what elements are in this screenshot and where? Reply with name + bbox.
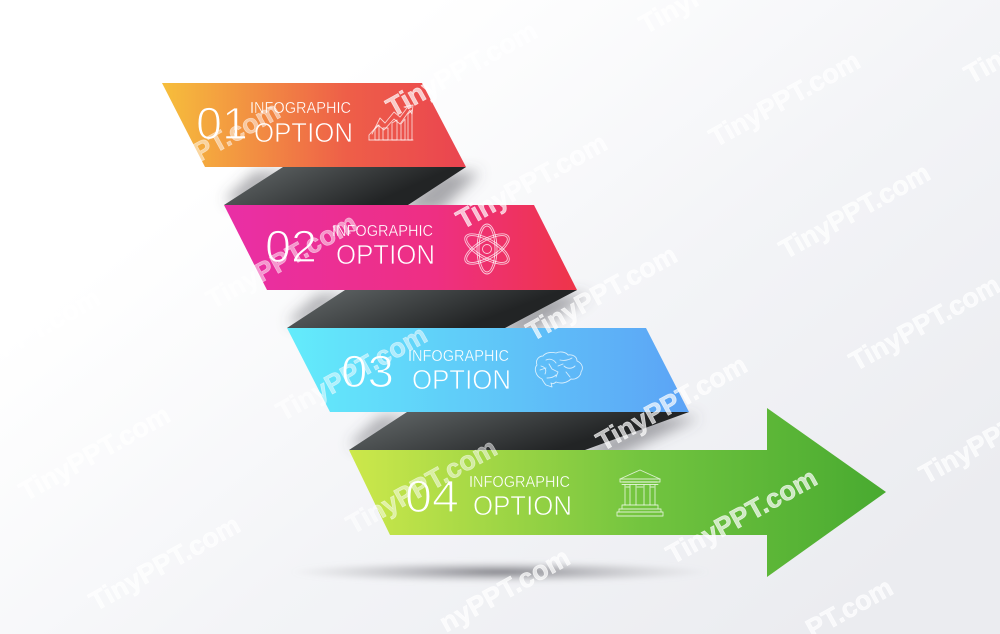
watermark: TinyPPT.com <box>14 399 175 507</box>
icon: atom <box>460 224 514 274</box>
watermark: TinyPPT.com <box>704 45 865 153</box>
watermark: TinyPPT.com <box>84 509 245 617</box>
number 03: 03 <box>341 346 394 397</box>
ribbon shadows <box>225 172 700 457</box>
label 03: INFOGRAPHIC <box>408 348 509 365</box>
dark fold 2 <box>287 290 577 328</box>
watermark: TinyPPT.com <box>661 462 822 570</box>
icon: classical building <box>617 470 663 516</box>
panel: option 03 <box>287 328 689 412</box>
panel: option 01 <box>162 83 466 167</box>
panel: option 04 arrow <box>349 408 886 577</box>
number 02: 02 <box>265 221 317 272</box>
label 04 <box>469 474 572 521</box>
floor shadow <box>290 561 710 583</box>
watermark: TinyPPT.com <box>451 127 612 235</box>
label 01: OPTION <box>254 117 353 148</box>
label 01: INFOGRAPHIC <box>250 100 351 117</box>
label 03 <box>408 348 511 395</box>
icon: rising chart <box>369 105 413 140</box>
label 03: OPTION <box>412 364 511 395</box>
panel: option 02 <box>224 205 577 290</box>
number 04: 04 <box>405 471 459 522</box>
label 02 <box>332 223 435 270</box>
dark fold 1 <box>224 167 466 205</box>
watermark: TinyPPT.com <box>341 432 502 540</box>
label 02: INFOGRAPHIC <box>332 223 433 240</box>
icon: brain <box>535 352 582 387</box>
watermark: TinyPPT.com <box>591 349 752 457</box>
watermark: TinyPPT.com <box>271 319 432 427</box>
label 04: INFOGRAPHIC <box>469 474 570 491</box>
number 01: 01 <box>196 98 248 149</box>
label 02: OPTION <box>336 239 435 270</box>
watermark: TinyPPT.com <box>774 157 935 265</box>
dark fold 3 <box>349 412 689 450</box>
watermark: TinyPPT.com <box>124 95 285 203</box>
watermark: TinyPPT.com <box>381 15 542 123</box>
label 01 <box>250 100 353 148</box>
label 04: OPTION <box>473 490 572 521</box>
watermark: TinyPPT.com <box>201 207 362 315</box>
watermark: TinyPPT.com <box>521 239 682 347</box>
